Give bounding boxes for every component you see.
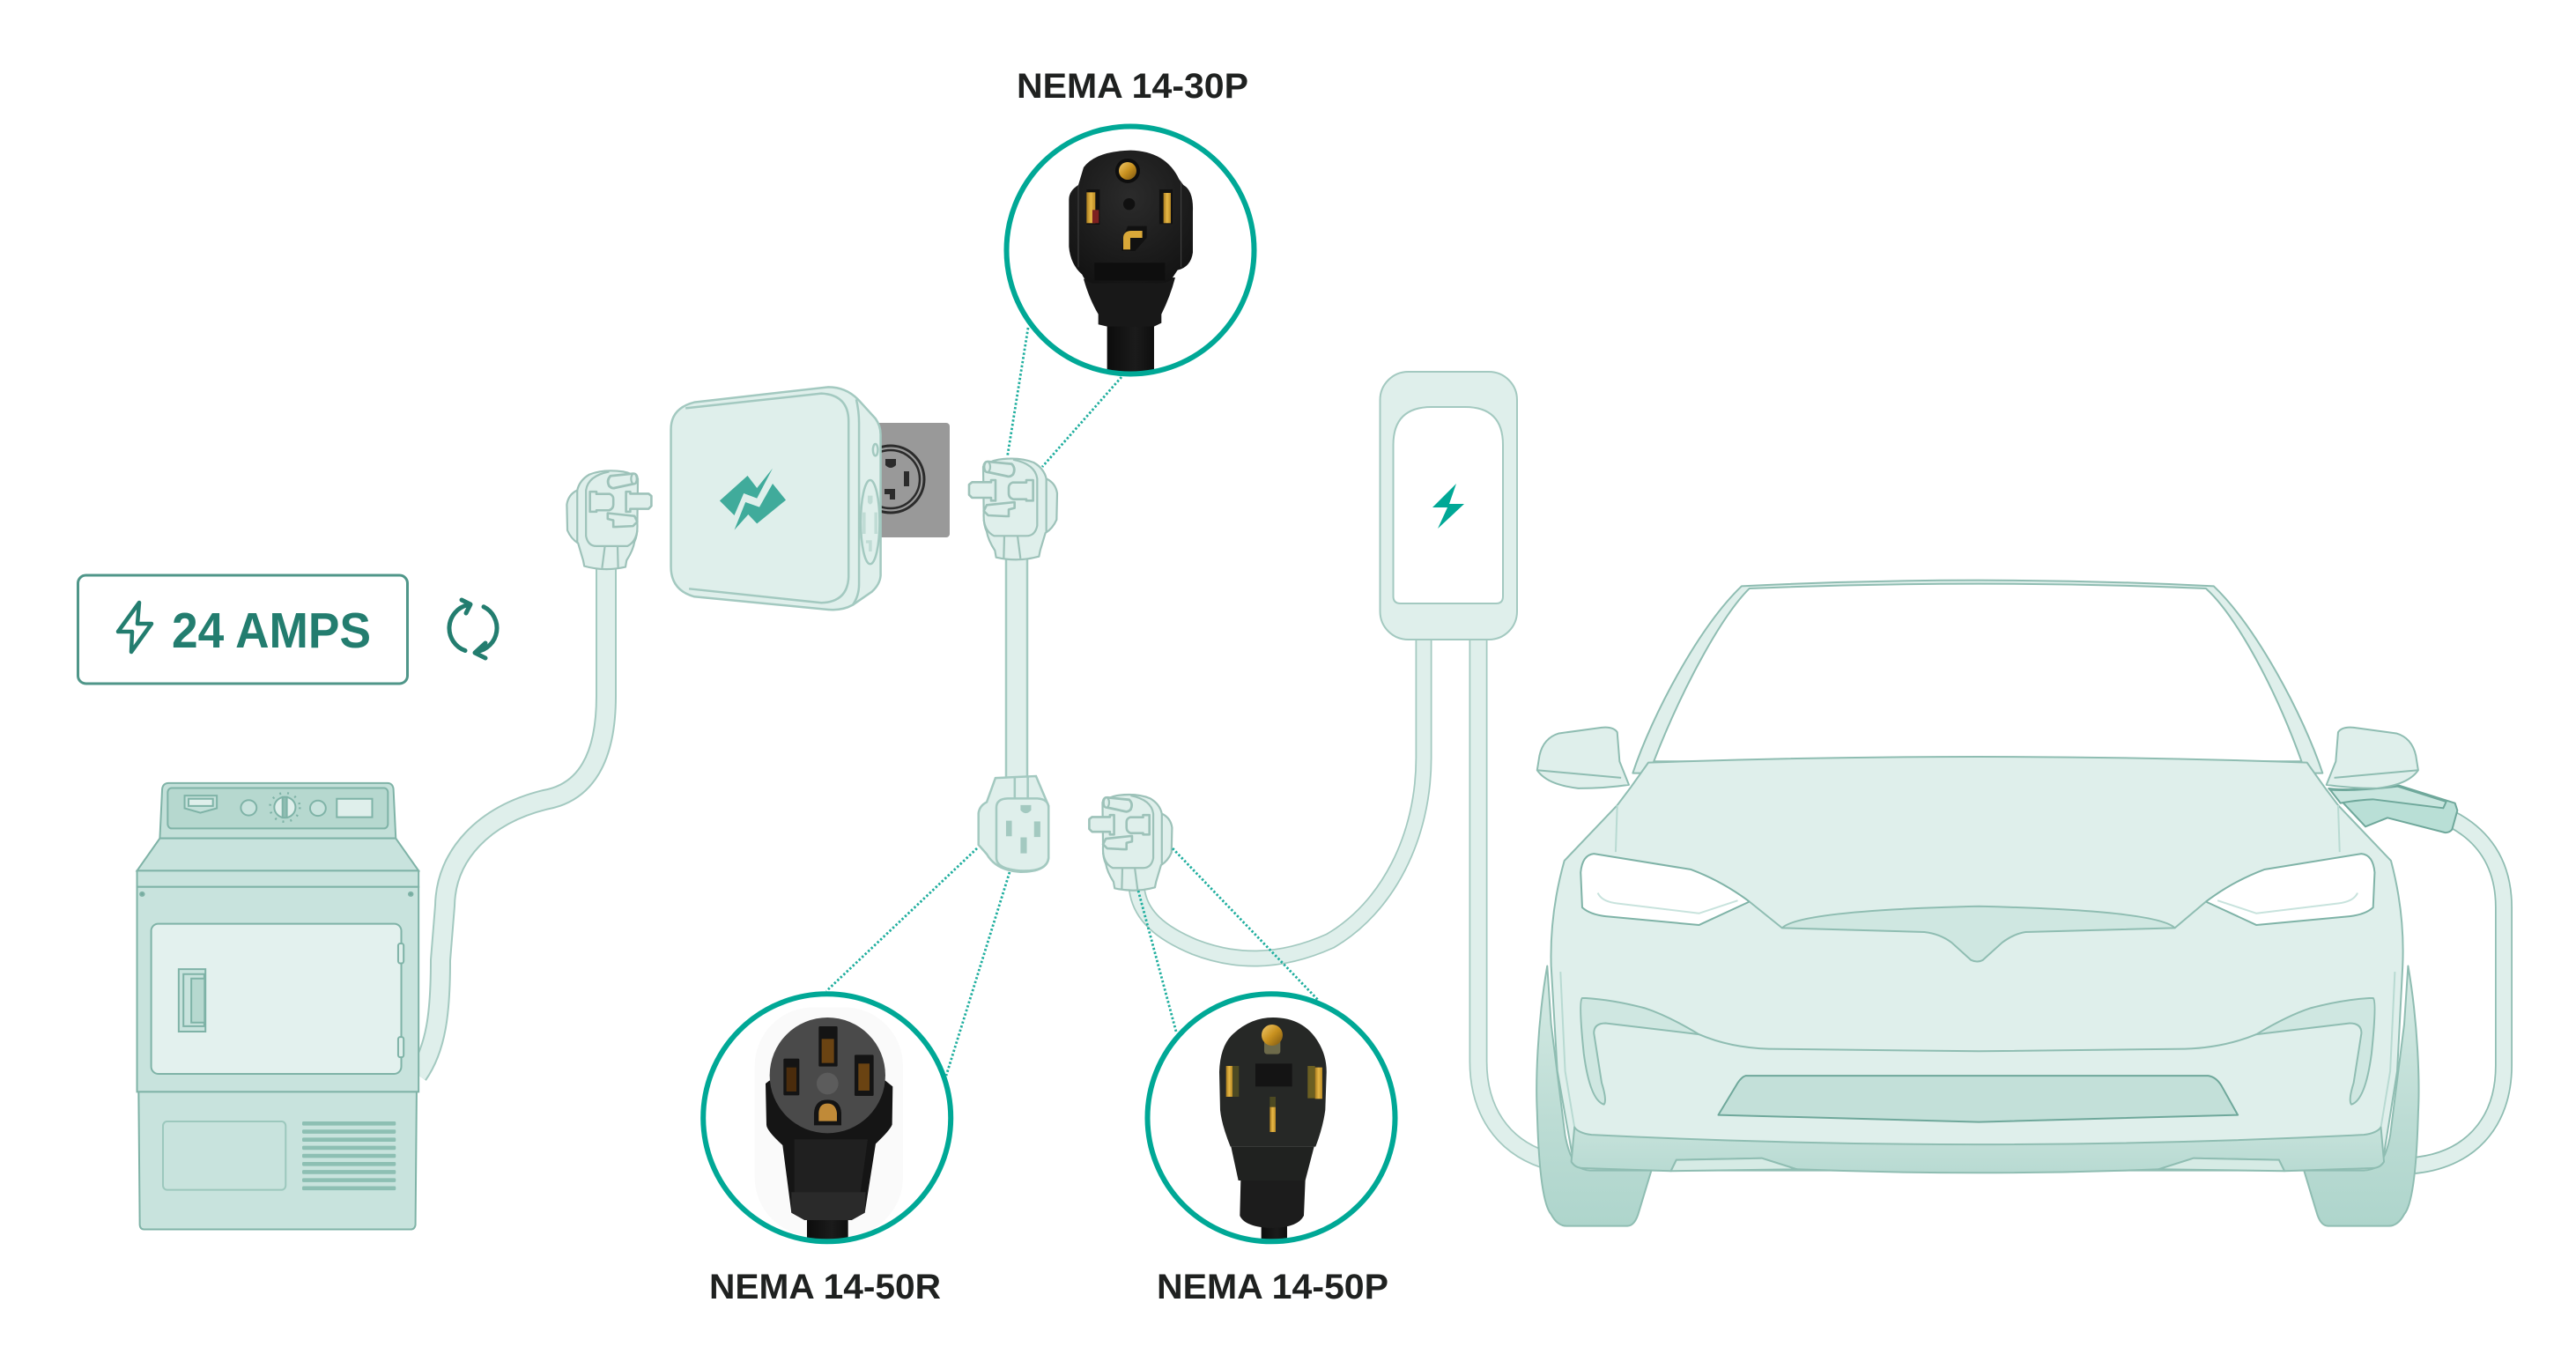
windshield frame — [1632, 581, 2322, 773]
dryer — [137, 783, 418, 1230]
dryer base — [138, 1092, 417, 1230]
14-50P small plug — [1089, 795, 1172, 891]
lower bumper — [1572, 1128, 2384, 1173]
wall charger — [1380, 372, 1543, 1159]
plug photo — [1219, 1018, 1327, 1247]
amperage badge — [78, 575, 407, 684]
mirrors — [1537, 728, 2418, 788]
ring — [1147, 994, 1395, 1241]
nose crest — [1782, 906, 2175, 961]
center cord with upper plug — [969, 459, 1057, 780]
cord from 14-50P plug to wall charger — [1136, 638, 1424, 958]
ring — [703, 994, 951, 1241]
tires — [1536, 966, 2418, 1226]
plug photo — [766, 1018, 893, 1239]
adapter box — [671, 387, 881, 610]
dryer body — [137, 839, 418, 1092]
icon: refresh arrows — [449, 600, 497, 658]
car charge cable — [2410, 820, 2504, 1166]
amperage badge: 24 AMPS — [172, 603, 371, 659]
icon: charging bolt — [1432, 484, 1464, 529]
charger output cable — [1478, 638, 1543, 1159]
callout: NEMA 14-50P — [1147, 994, 1395, 1306]
car body — [1551, 757, 2403, 1171]
icon: lightning outline — [118, 603, 152, 652]
left plug on dryer cord — [566, 470, 651, 569]
callout: NEMA 14-50R — [703, 994, 951, 1306]
callout: NEMA 14-30P — [1006, 67, 1255, 381]
icon: brand lightning logo — [720, 469, 786, 530]
windshield — [1654, 584, 2301, 761]
bumper crease and air intakes — [1580, 998, 2375, 1105]
label: NEMA 14-50R — [709, 1268, 941, 1306]
dryer power cord — [418, 564, 606, 1075]
center receptacle (14-50R) — [979, 776, 1048, 872]
dryer control console — [159, 783, 396, 839]
dryer door — [152, 924, 403, 1074]
wall outlet plate — [857, 423, 950, 537]
charging handle — [2328, 786, 2457, 832]
plug photo — [1069, 151, 1193, 381]
label: NEMA 14-50P — [1157, 1268, 1388, 1306]
ring — [1006, 127, 1255, 374]
car — [1536, 581, 2504, 1226]
dotted leader lines — [826, 328, 1319, 1076]
lower grille — [1718, 1076, 2238, 1122]
heading: NEMA 14-30P — [1017, 67, 1248, 106]
headlights — [1580, 854, 2374, 925]
